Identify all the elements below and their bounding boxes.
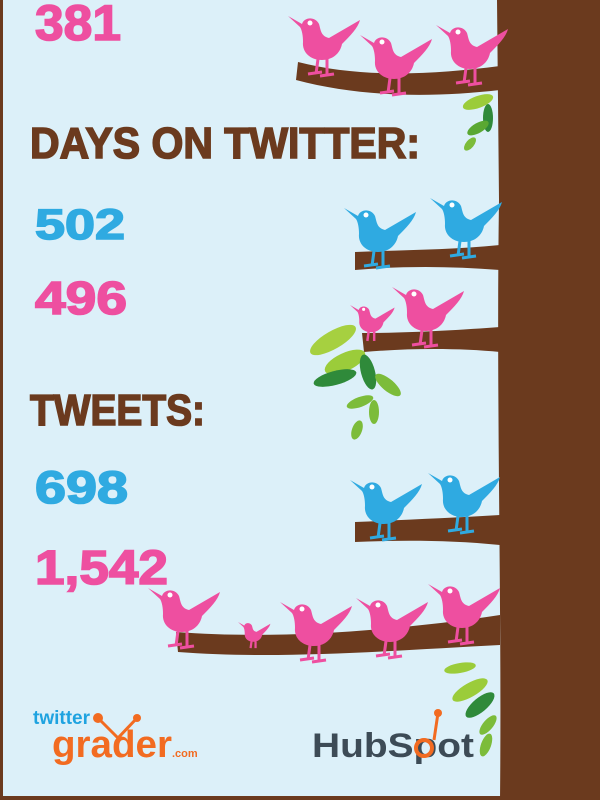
logo: hubspot: HubSpot — [312, 727, 474, 765]
birds: pink 496 — [350, 287, 464, 347]
branch 4 — [355, 515, 500, 545]
branch 3 — [362, 327, 500, 352]
logo: hubspot — [312, 709, 474, 765]
heading: days on twitter: DAYS ON TWITTER: — [30, 119, 420, 168]
leaves middle — [306, 319, 404, 441]
tree trunk — [497, 0, 600, 800]
stat: 502: 502 — [35, 201, 125, 249]
logo: twitter grader — [33, 708, 198, 766]
leaves top — [461, 91, 495, 153]
logo: twitter grader: grader — [52, 724, 172, 766]
birds: bottom pink — [148, 584, 500, 662]
stat: 1,542: 1,542 — [35, 542, 168, 595]
branch 5 — [176, 615, 500, 655]
birds: top pink — [288, 16, 508, 95]
logo: twitter grader: twitter — [33, 708, 91, 729]
branch 1 — [296, 62, 500, 95]
heading: tweets: TWEETS: — [30, 386, 205, 435]
stat: 698: 698 — [35, 462, 128, 513]
stat: 496: 496 — [35, 272, 127, 324]
logo: twitter grader: .com — [172, 748, 198, 760]
birds: blue 502 — [344, 198, 502, 268]
leaves bottom — [443, 660, 500, 758]
branch 2 — [355, 245, 500, 270]
birds: blue 698 — [350, 473, 500, 540]
